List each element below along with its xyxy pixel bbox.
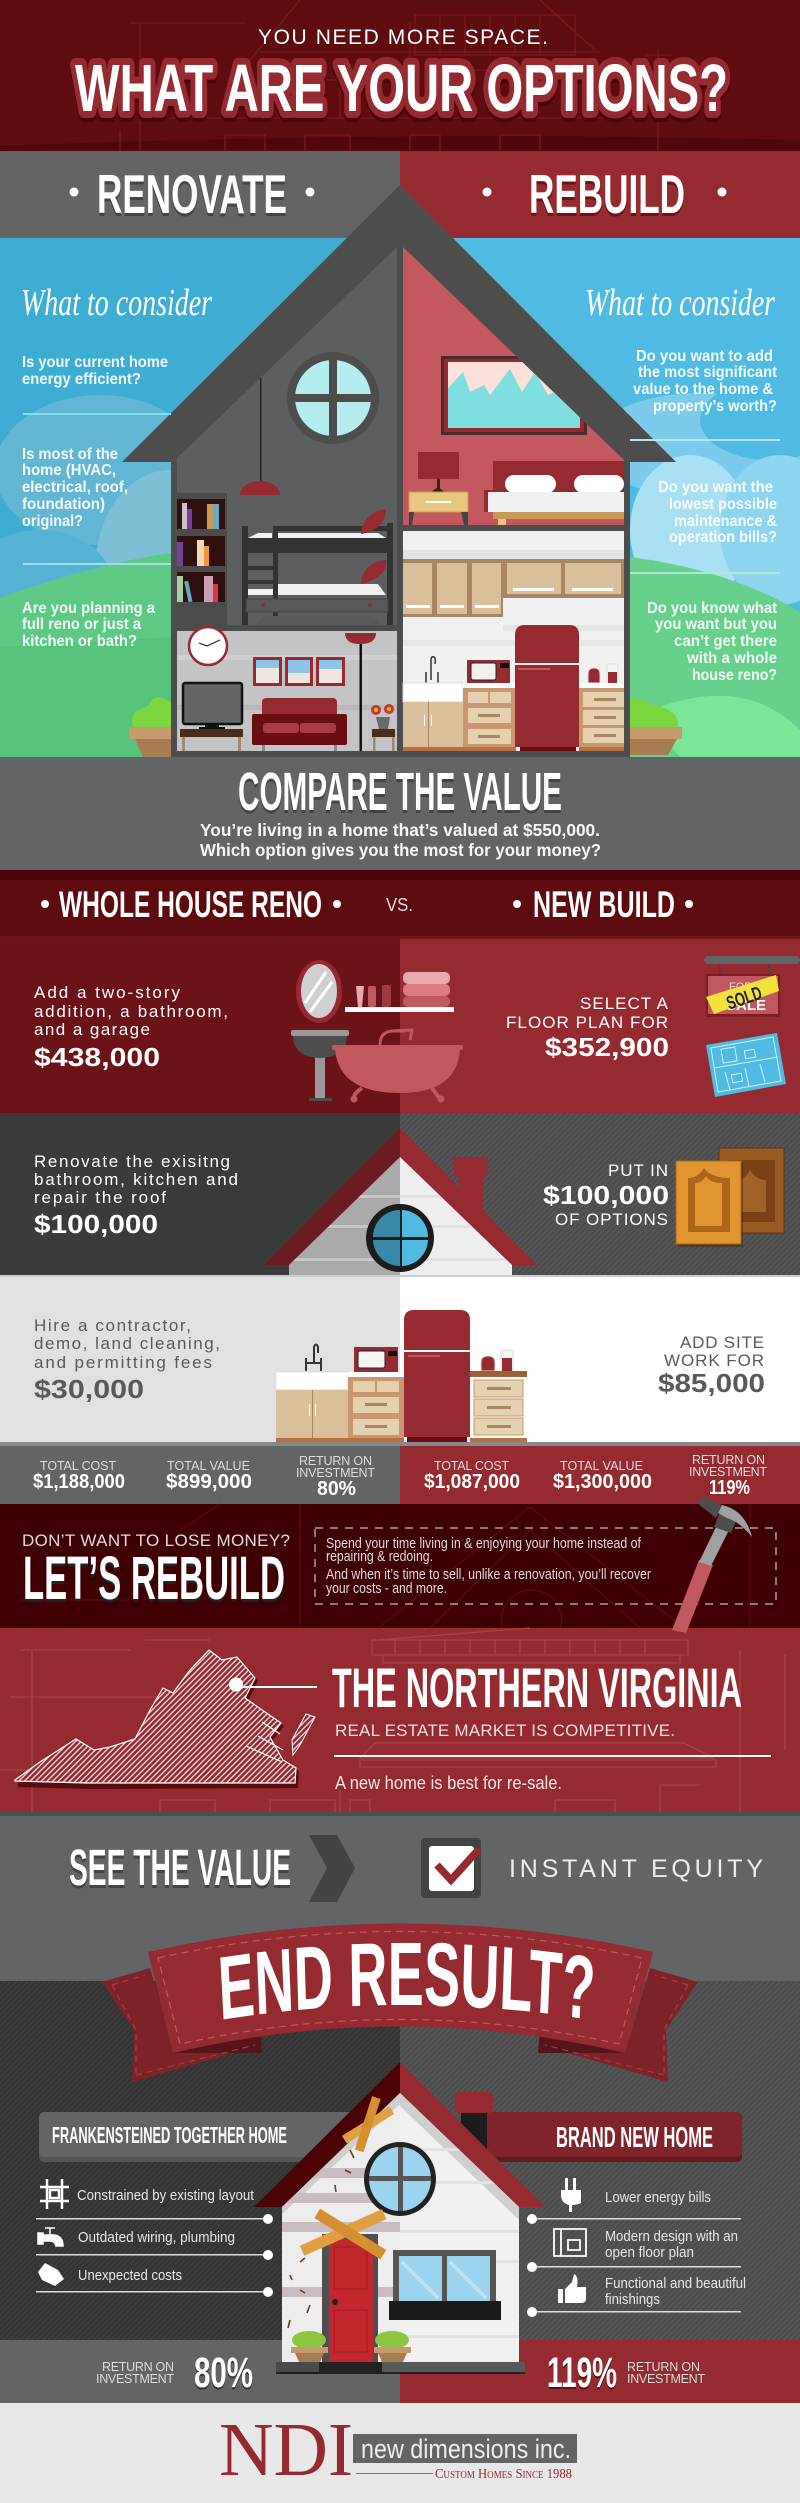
item: modern design: Modern design with an — [605, 2228, 738, 2245]
stat: return on investment: RETURN ON — [299, 1454, 372, 1468]
question 3: with a whole — [686, 650, 777, 667]
icon: wall clock — [189, 627, 227, 665]
dirt specks — [288, 2140, 365, 2328]
question 2: foundation) — [22, 496, 105, 513]
stat: total value — [166, 1459, 252, 1493]
icon: checkbox — [421, 1838, 481, 1898]
intro text: Which option gives you the most for your money? — [200, 840, 601, 860]
text: instant equity: INSTANT EQUITY — [509, 1855, 763, 1883]
question 2: operation bills? — [669, 529, 777, 546]
panel: sky and hills — [0, 238, 800, 757]
text: repair: bathroom, kitchen and — [34, 1170, 238, 1189]
room: attic bunk room — [177, 247, 397, 625]
drawers — [463, 683, 515, 748]
text: repair: Renovate the exisitng — [34, 1152, 230, 1171]
text: repair: $100,000 — [34, 1209, 158, 1239]
stat: total cost: $1,188,000 — [33, 1471, 125, 1493]
sofa — [252, 698, 347, 751]
question 3: Are you planning a — [22, 600, 155, 617]
stat: total cost — [33, 1459, 125, 1493]
icon: pedestal sink — [291, 1030, 349, 1101]
item: unexpected costs — [36, 2263, 273, 2297]
roof and walls — [122, 185, 676, 757]
heading: don't want to lose money: DON’T WANT TO LOSE MONEY? — [22, 1531, 290, 1550]
icon: blueprint — [706, 1033, 786, 1097]
picture with mountains — [441, 356, 587, 435]
text: floor plan — [506, 994, 669, 1062]
text: fees — [34, 1316, 220, 1404]
icon: hammer — [672, 1497, 752, 1633]
planter left — [129, 697, 172, 757]
item: outdated wiring — [36, 2228, 273, 2260]
question 3: kitchen or bath? — [22, 633, 137, 650]
panel: header — [0, 0, 800, 151]
question 1: energy efficient? — [22, 371, 141, 388]
item: constrained layout: Constrained by existing layout — [77, 2187, 255, 2204]
text: real estate market: REAL ESTATE MARKET IS COMPETITIVE. — [335, 1721, 675, 1740]
panel: cost row 3 — [0, 1277, 800, 1442]
intro text — [200, 820, 601, 860]
room: living room — [177, 627, 397, 751]
upper cabinets — [403, 559, 624, 617]
heading: let's rebuild: LET’S REBUILD — [23, 1544, 285, 1612]
stat: rebuild return on investment: RETURN ON — [627, 2360, 700, 2374]
text: floor plan: FLOOR PLAN FOR — [506, 1013, 668, 1032]
icon: small house — [264, 1128, 537, 1277]
list: renovation drawbacks — [36, 2179, 273, 2297]
question 2: maintenance & — [674, 513, 777, 530]
icon: plug — [561, 2178, 581, 2212]
text: addition: $438,000 — [34, 1042, 160, 1072]
stat: rebuild return on investment: INVESTMENT — [627, 2372, 705, 2386]
icon: thumbs up — [558, 2274, 586, 2303]
window — [389, 2250, 501, 2320]
plant and side table — [371, 704, 395, 751]
panel: option bands — [0, 151, 800, 247]
item: functional finishings — [527, 2274, 746, 2317]
refrigerator — [515, 625, 579, 751]
heading: rebuild: REBUILD — [529, 163, 685, 225]
stat: renovate return on investment: 80% — [194, 2349, 253, 2397]
question 3 — [647, 600, 777, 684]
text: options — [543, 1161, 669, 1229]
question 2: original? — [22, 513, 83, 530]
dashed text box — [315, 1528, 776, 1604]
stat: return on investment — [689, 1453, 767, 1499]
text: addition: Add a two-story — [34, 983, 180, 1002]
icon: price tag — [38, 2263, 64, 2286]
panel: what to consider right — [585, 282, 780, 684]
question 2: Is most of the — [22, 446, 118, 463]
list: rebuild benefits — [527, 2178, 746, 2317]
television — [180, 683, 243, 751]
panel: cost row 2 — [0, 1113, 800, 1277]
icon: pendant lamp — [240, 378, 280, 495]
icon: floor grid — [40, 2179, 69, 2209]
stat: return on investment: 119% — [709, 1477, 750, 1499]
text: addition: and a garage — [34, 1020, 150, 1039]
question 1: Do you want to add — [636, 348, 773, 365]
room: kitchen — [403, 531, 624, 751]
stat: return on investment: INVESTMENT — [689, 1465, 767, 1479]
panel: totals right — [400, 1446, 800, 1504]
panel: let's rebuild — [0, 1504, 800, 1650]
floor lamp — [345, 633, 376, 751]
panel: see the value — [0, 1812, 800, 1981]
icon: cabinet doors — [676, 1148, 784, 1247]
text: addition — [34, 983, 228, 1072]
question 1: property’s worth? — [653, 398, 777, 415]
dashed text box: And when it’s time to sell, unlike a renovation, you’ll recover — [326, 1567, 651, 1583]
item: constrained layout — [36, 2179, 273, 2224]
sink unit — [403, 657, 463, 747]
stat: total value: $1,300,000 — [553, 1471, 652, 1493]
item: unexpected costs: Unexpected costs — [78, 2267, 182, 2284]
stat: return on investment: INVESTMENT — [296, 1466, 375, 1480]
icon: sold sign: FOR — [729, 981, 752, 993]
stat: total cost: TOTAL COST — [40, 1459, 116, 1473]
dashed text box: your costs - and more. — [326, 1581, 447, 1597]
item: modern design — [527, 2228, 741, 2272]
question 1: value to the home & — [633, 381, 773, 398]
door — [322, 2234, 378, 2362]
microwave — [467, 660, 510, 683]
dashed text box: Spend your time living in & enjoying your home instead of — [326, 1536, 642, 1552]
stat: renovate return on investment: RETURN ON — [102, 2360, 174, 2374]
question 2: lowest possible — [669, 496, 777, 513]
question 3: Do you know what — [647, 600, 777, 617]
question 2: home (HVAC, — [22, 462, 116, 479]
item: functional finishings: finishings — [605, 2291, 660, 2308]
stat: renovate return on investment — [96, 2349, 253, 2397]
house cutaway — [122, 185, 682, 757]
stat: total value: TOTAL VALUE — [167, 1459, 250, 1473]
map: virginia — [15, 1650, 317, 1789]
heading: see the value: SEE THE VALUE — [69, 1839, 291, 1896]
walls — [282, 2093, 519, 2362]
bedside lamp — [418, 452, 459, 492]
icon: sold sign: SOLD — [724, 983, 765, 1015]
text: fees: and permitting fees — [34, 1353, 212, 1372]
item: modern design: open floor plan — [605, 2244, 694, 2261]
heading: whole house reno: WHOLE HOUSE RENO — [59, 884, 322, 925]
text: new home re-sale: A new home is best for re-sale. — [335, 1773, 562, 1793]
question 3: can’t get there — [674, 633, 777, 650]
stat: total cost — [424, 1459, 520, 1493]
heading: you need more space: YOU NEED MORE SPACE. — [258, 26, 548, 49]
icon: sold sign — [704, 956, 800, 1017]
text: site work: ADD SITE — [680, 1333, 764, 1352]
question 2 — [658, 479, 777, 546]
stat: total value: $899,000 — [166, 1471, 252, 1493]
panel: what to consider left — [21, 282, 212, 650]
logo tagline: Custom Homes Since 1988 — [435, 2467, 572, 2482]
text: repair — [34, 1152, 238, 1239]
right drawers — [579, 683, 624, 748]
planters — [291, 2331, 411, 2362]
label: frankensteined together home: FRANKENSTEINED TOGETHER HOME — [52, 2122, 287, 2148]
text: site work — [658, 1333, 765, 1398]
item: functional finishings: Functional and beautiful — [605, 2275, 746, 2292]
vs: VS. — [386, 895, 413, 915]
round window — [364, 2142, 436, 2216]
question 3: you want but you — [655, 616, 777, 633]
icon: bathtub — [332, 1030, 463, 1102]
heading: new build: NEW BUILD — [533, 884, 675, 925]
item: lower energy bills — [527, 2178, 741, 2224]
planter right — [630, 698, 682, 755]
illustration: big house — [254, 2062, 545, 2374]
question 2 — [22, 446, 128, 530]
stat: rebuild return on investment — [547, 2349, 705, 2397]
ribbon: end result — [102, 1924, 698, 2082]
label: frankensteined together home — [39, 2112, 359, 2162]
pictures — [253, 657, 345, 686]
heading: renovate: RENOVATE — [97, 163, 287, 225]
question 1 — [22, 354, 168, 388]
panel: northern virginia — [0, 1628, 800, 1812]
stat: return on investment: RETURN ON — [692, 1453, 765, 1467]
stat: total value: TOTAL VALUE — [560, 1459, 643, 1473]
stat: return on investment — [296, 1454, 375, 1500]
label: brand new home — [470, 2112, 742, 2162]
icon: kitchen — [276, 1310, 527, 1442]
text: floor plan: SELECT A — [580, 994, 669, 1013]
question 1 — [633, 348, 777, 415]
question 2: electrical, roof, — [22, 479, 128, 496]
panel: end result background — [0, 1981, 800, 2403]
text: options: OF OPTIONS — [555, 1210, 668, 1229]
question 1: Is your current home — [22, 354, 168, 371]
arrow — [309, 1835, 355, 1902]
bunk bed — [242, 509, 393, 625]
icon: floor plan — [554, 2229, 586, 2256]
text: floor plan: $352,900 — [545, 1032, 669, 1062]
stat: renovate return on investment: INVESTMENT — [96, 2372, 174, 2386]
heading: end result — [220, 1942, 593, 2020]
bed — [484, 461, 624, 525]
question 3: house reno? — [692, 667, 777, 684]
icon: faucet — [38, 2228, 63, 2246]
logo name box: new dimensions inc. — [361, 2434, 571, 2464]
panel: versus heading band — [0, 870, 800, 939]
room: bedroom — [403, 247, 624, 525]
chimney — [455, 2092, 493, 2155]
planks: door — [300, 2209, 387, 2259]
text: options: $100,000 — [543, 1180, 669, 1210]
footer logo — [0, 2403, 800, 2503]
stat: rebuild return on investment: 119% — [547, 2349, 617, 2397]
panel: cost row 1 — [0, 939, 800, 1113]
stat: total value — [553, 1459, 652, 1493]
icon: round window — [287, 352, 379, 444]
heading: What to consider — [21, 282, 212, 324]
front step — [276, 2362, 525, 2374]
text: repair: repair the roof — [34, 1188, 166, 1207]
question 3 — [22, 600, 155, 650]
stat: total cost: TOTAL COST — [434, 1459, 509, 1473]
icon: mirror — [296, 960, 342, 1023]
roof — [254, 2062, 545, 2207]
item: lower energy bills: Lower energy bills — [605, 2189, 711, 2206]
icon: sold sign: SALE — [726, 997, 766, 1014]
jars — [588, 664, 618, 683]
logo letters: NDI — [219, 2408, 353, 2492]
stat: total cost: $1,087,000 — [424, 1471, 520, 1493]
text: fees: Hire a contractor, — [34, 1316, 191, 1335]
intro text: You’re living in a home that’s valued at $550,000. — [200, 820, 600, 840]
panel: totals left — [0, 1442, 800, 1504]
text: site work: $85,000 — [658, 1368, 765, 1398]
text: options: PUT IN — [608, 1161, 668, 1180]
question 3: full reno or just a — [22, 616, 141, 633]
item: outdated wiring: Outdated wiring, plumbing — [78, 2229, 235, 2246]
text: fees: $30,000 — [34, 1374, 144, 1404]
panel: compare the value — [0, 757, 800, 870]
planks: upper — [342, 2096, 394, 2152]
text: addition: addition, a bathroom, — [34, 1002, 228, 1021]
text: site work: WORK FOR — [664, 1351, 764, 1370]
text: fees: demo, land cleaning, — [34, 1334, 220, 1353]
bookshelf — [177, 493, 227, 625]
question 2: Do you want the — [658, 479, 773, 496]
stat: return on investment: 80% — [317, 1478, 356, 1500]
dashed text box: repairing & redoing. — [326, 1549, 433, 1565]
question 1: the most significant — [638, 364, 777, 381]
nightstand — [409, 492, 468, 525]
icon: shelf with bottles and towels — [345, 972, 454, 1012]
heading: end result: END RESULT? — [220, 1942, 593, 2020]
